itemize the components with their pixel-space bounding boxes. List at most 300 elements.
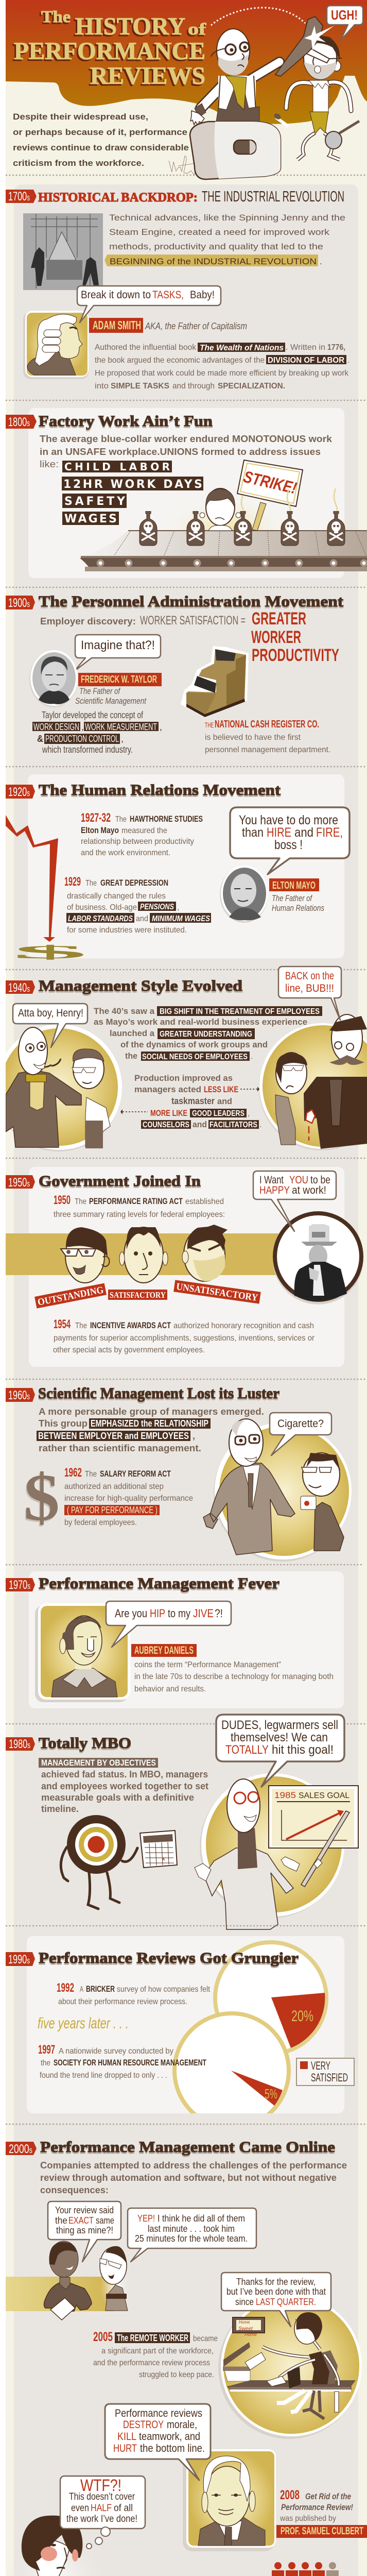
intro text: or perhaps because of it, performance: [13, 127, 187, 137]
paragraph: [40, 2160, 347, 2195]
speech bubble: exact same: thing as mine?!: [56, 2225, 113, 2235]
text: salary reform act: authorized an additional step: [64, 1482, 164, 1491]
text: 2008 Culbert book: was published by: [279, 2514, 336, 2523]
pie chart 1997: 5 percent: 5%: [265, 2086, 277, 2102]
speech bubble: hire and fire: You have to do more: [239, 813, 338, 827]
speech bubble: want you to be happy: I Want: [259, 1174, 284, 1186]
stencil list of union issues: [62, 461, 203, 526]
intro text: [13, 112, 189, 168]
paragraph: management by objectives: achieved fad status. In MBO, managers: [41, 1769, 208, 1780]
paragraph: [40, 434, 333, 469]
dotted swing arc: [211, 8, 305, 25]
speech bubble: last quarter: Thanks for the review,: [236, 2277, 316, 2287]
text: big shift: GREATER UNDERSTANDING: [160, 1030, 252, 1039]
title: PERFORMANCE: [14, 38, 205, 65]
header banner: [6, 0, 367, 179]
flattened dollar sign: $: [12, 942, 88, 962]
thought bubble: WTF: [60, 2476, 145, 2549]
speech bubble: destroy morale: the bottom line.: [140, 2443, 205, 2454]
Adam Smith biography: into: [95, 382, 109, 391]
speech bubble: last minute: [128, 2208, 256, 2262]
equation: worker satisfaction = greater worker productivity: Employer discovery:: [40, 616, 136, 626]
heading: HISTORICAL BACKDROP:: [38, 191, 198, 205]
speech bubble: destroy morale: DESTROY: [123, 2419, 164, 2431]
text: incentive awards act: 1954: [54, 1317, 71, 1331]
text: incentive awards act: INCENTIVE AWARDS ACT: [90, 1320, 171, 1330]
text: 1992 Bricker survey: A: [80, 1985, 83, 1994]
heading: The Personnel Administration Movement: [39, 593, 343, 610]
portrait: Aubrey Daniels: [35, 1603, 130, 1702]
Adam Smith biography: and through: [172, 382, 215, 391]
name tag: Elton Mayo: Human Relations: [272, 903, 324, 913]
speech bubble: want you to be happy: YOU: [289, 1174, 308, 1186]
intro paragraph: Steam Engine, created a need for improved work: [109, 227, 330, 237]
text: 1997 SHRM survey: SOCIETY FOR HUMAN RESOURCE MANAGEMENT: [54, 2058, 206, 2067]
character: coworker with review: [44, 2241, 92, 2320]
speech bubble: UGH: [327, 6, 363, 40]
speech bubble: last quarter: but I’ve been done with that: [226, 2286, 326, 2297]
poison bottles: [139, 511, 345, 546]
text: performance rating act: established: [185, 1197, 224, 1206]
paragraph: management by objectives: timeline.: [41, 1804, 79, 1814]
speech bubble: back on the line: BACK on the: [285, 970, 334, 982]
legend: very satisfied: SATISFIED: [311, 2071, 348, 2084]
text: salary reform act: 1962: [64, 1466, 82, 1480]
Great Depression text: 1929: [64, 875, 81, 889]
intro paragraph: BEGINNING of the INDUSTRIAL REVOLUTION: [110, 257, 317, 266]
right circle: taskmaster and injured worker: [259, 1014, 367, 1150]
Hawthorne studies text: [81, 811, 203, 857]
name tag: Taylor: FREDERICK W. TAYLOR: [81, 674, 157, 685]
paragraph: review through automation and software, but not without negative: [40, 2173, 337, 2183]
section: 1990s reviews got grungier: [6, 1936, 354, 2128]
text: incentive awards act: [53, 1317, 315, 1354]
text: salary reform act: increase for high-quality performance: [64, 1494, 193, 1503]
circle: manager offering cigarette: [203, 1419, 352, 1562]
name tag: Elton Mayo: ELTON MAYO: [272, 880, 316, 891]
Great Depression text: ,: [177, 903, 179, 912]
heading: Factory Work Ain’t Fun: [39, 413, 213, 430]
paragraph: in an UNSAFE workplace.UNIONS formed to address issues: [40, 447, 321, 457]
strike sign: STRIKE!: [242, 467, 299, 498]
text: 1992 Bricker survey: 1992: [57, 1981, 74, 1995]
intro text: criticism from the workforce.: [13, 158, 144, 168]
speech bubble: legwarmers: [216, 1715, 344, 1787]
face: unsatisfactory: [182, 1225, 228, 1281]
panel background: [29, 1167, 344, 1367]
Taylor description: ,: [121, 734, 124, 744]
Taylor description: ,: [81, 722, 84, 732]
speech bubble: last quarter: since: [235, 2297, 254, 2307]
text: big shift: as Mayo’s work and real-world business experience: [94, 1017, 307, 1027]
speech bubble: exact same: EXACT: [68, 2215, 94, 2226]
text: less like taskmaster, more like leaders: [134, 1073, 261, 1129]
text: 1997 SHRM survey: [38, 2043, 206, 2080]
National Cash Register caption: [205, 719, 330, 754]
speech bubble: hip to my jive: to my: [168, 1607, 190, 1620]
stencil list of union issues: WAGES: [64, 513, 117, 526]
section: 2000s came online: [5, 2139, 367, 2576]
section: 1980s totally MBO: [6, 1715, 358, 1929]
paragraph: personable managers: EMPHASIZED the RELATIONSHIP: [91, 1418, 208, 1429]
conveyor belt: [80, 531, 367, 571]
name tag: Adam Smith: ADAM SMITH: [93, 318, 141, 332]
equation: worker satisfaction = greater worker productivity: WORKER SATISFACTION =: [140, 614, 246, 628]
paragraph: management by objectives: [39, 1758, 208, 1814]
text: 2008 Culbert book: Get Rid of the: [305, 2492, 351, 2501]
text: salary reform act: ( PAY FOR PERFORMANCE ): [67, 1505, 158, 1515]
Great Depression text: LABOR STANDARDS: [68, 914, 133, 923]
heading: [38, 189, 344, 205]
Great Depression text: for some industries were instituted.: [67, 926, 187, 935]
speech bubble: want you to be happy: HAPPY: [259, 1184, 290, 1196]
Adam Smith biography: [95, 343, 349, 391]
year tag 2000s: 2000s: [9, 2142, 32, 2156]
speech bubble: last quarter: [221, 2273, 331, 2327]
equation: worker satisfaction = greater worker productivity: WORKER: [251, 628, 301, 647]
Great Depression text: of business. Old-age: [67, 903, 137, 912]
strike sign: [237, 460, 303, 531]
glow behind coworker: [100, 2264, 131, 2311]
speech bubble: hire and fire: HIRE: [267, 825, 291, 840]
text: big shift: BIG SHIFT IN THE TREATMENT OF EMPLOYEES: [160, 1007, 320, 1016]
speech bubble: last minute: I think he did all of them: [158, 2213, 245, 2224]
text: 1992 Bricker survey: [57, 1981, 210, 2006]
text: big shift: The 40’s saw a: [94, 1006, 155, 1016]
signature: [169, 156, 209, 175]
speech bubble: cigarette: Cigarette?: [277, 1418, 324, 1430]
portrait: Adam Smith: [23, 311, 89, 379]
heading: Performance Management Fever: [39, 1575, 279, 1592]
character: manager with club: [190, 29, 279, 126]
speech bubble: destroy morale: teamwork, and: [139, 2431, 200, 2443]
text: performance rating act: [54, 1193, 225, 1219]
text: less like taskmaster, more like leaders: ,: [248, 1109, 250, 1118]
paragraph: personable managers: This group: [39, 1418, 88, 1429]
text: incentive awards act: The: [75, 1321, 87, 1330]
Taylor description: ,: [160, 722, 162, 732]
Hawthorne studies text: The: [115, 815, 127, 824]
speech bubble: want you to be happy: at work!: [292, 1184, 326, 1196]
text: 2005 remote worker: 2005: [93, 2330, 113, 2344]
left circle: good manager and worker: [0, 1024, 122, 1151]
portrait: Samuel Culbert: [183, 2449, 276, 2551]
year tag 1920s: 1920s: [8, 785, 30, 799]
name tag: Elton Mayo: The Father of: [272, 893, 313, 903]
Taylor description: [32, 710, 162, 755]
Adam Smith biography: SIMPLE TASKS: [111, 382, 169, 391]
target character with calendar: x: [162, 1856, 165, 1862]
text: less like taskmaster, more like leaders: .: [259, 1121, 261, 1129]
paragraph: personable managers: A more personable group of managers emerged.: [39, 1406, 264, 1417]
speech bubble: legwarmers: TOTALLY: [225, 1743, 269, 1757]
header background shape: [6, 0, 367, 124]
speech bubble: atta boy: Atta boy, Henry!: [18, 1007, 83, 1019]
speech bubble: last minute: 25 minutes for the whole team.: [135, 2233, 248, 2244]
text: 2008 Culbert book: [276, 2488, 367, 2538]
name tag: Taylor: [75, 673, 162, 706]
Great Depression text: PENSIONS: [140, 903, 174, 911]
heading: Totally MBO: [39, 1735, 131, 1752]
Hawthorne studies text: measured the: [121, 826, 167, 835]
five years later: five years later . . .: [38, 2015, 129, 2032]
text: less like taskmaster, more like leaders: and: [217, 1096, 232, 1106]
paragraph: Companies attempted to address the challenges of the performance: [40, 2160, 347, 2171]
speech bubble: hire and fire: FIRE,: [316, 825, 343, 840]
gold band behind coworkers: [6, 2277, 113, 2311]
cash register: [181, 646, 249, 718]
Adam Smith biography: DIVISION OF LABOR: [268, 356, 344, 365]
steam wisps: [241, 488, 337, 519]
speech bubble: legwarmers: themselves! We can: [231, 1731, 328, 1744]
text: 2005 remote worker: a significant part of the workforce,: [101, 2347, 214, 2355]
speech bubble: hip to my jive: JIVE: [193, 1607, 214, 1620]
Adam Smith biography: .: [347, 356, 349, 365]
text: salary reform act: [64, 1466, 193, 1527]
speech bubble: last quarter: LAST QUARTER.: [256, 2297, 316, 2307]
speech bubble: break it down: Break it down to: [81, 289, 151, 301]
arrow left: to good leader: [120, 1109, 148, 1114]
speech bubble: imagine that: Imagine that?!: [81, 638, 155, 652]
Taylor description: WORK MEASUREMENT: [85, 722, 157, 732]
text: big shift: the: [125, 1051, 137, 1061]
speech bubble: destroy morale: Performance reviews: [115, 2408, 202, 2419]
speech bubble: last minute: last minute . . . took him: [148, 2224, 235, 2234]
glow behind worker: [160, 495, 293, 567]
text: 1997 SHRM survey: the: [41, 2059, 50, 2067]
paragraph: personable managers: BETWEEN EMPLOYER and EMPLOYEES: [38, 1431, 189, 1441]
National Cash Register caption: THE: [205, 721, 214, 729]
speech bubble: legwarmers: DUDES, legwarmers sell: [221, 1718, 338, 1732]
speech bubble: exact same: same: [96, 2215, 114, 2226]
Hawthorne studies text: and the work environment.: [81, 849, 170, 857]
thought bubble: WTF: WTF?!: [80, 2476, 121, 2495]
intro paragraph: [104, 213, 345, 266]
stone wheel: [190, 122, 281, 179]
year tag 1900s: 1900s: [8, 596, 30, 610]
target character with calendar: [61, 1815, 177, 1909]
speech bubble: destroy morale: HURT: [113, 2443, 137, 2454]
section: 1960s scientific management lost: [6, 1385, 352, 1562]
speech bubble: hip to my jive: [106, 1601, 231, 1647]
chart board: 1985 sales goal: [269, 1786, 358, 1848]
striking worker: [200, 488, 241, 531]
speech bubble: exact same: [48, 2201, 121, 2262]
year tag 1700s: 1700s: [8, 190, 30, 204]
heading: Performance Management Came Online: [40, 2139, 335, 2156]
Adam Smith biography: SPECIALIZATION.: [218, 382, 285, 391]
text: 1992 Bricker survey: survey of how companies felt: [117, 1985, 210, 1994]
Great Depression text: MINIMUM WAGES: [152, 914, 210, 923]
text: 2005 remote worker: and the performance review process: [93, 2359, 210, 2367]
text: salary reform act: by federal employees.: [64, 1518, 137, 1527]
name tag: Adam Smith: AKA, the Father of Capitalism: [145, 321, 247, 331]
text: less like taskmaster, more like leaders: LESS LIKE: [204, 1084, 238, 1094]
character: caveman: [273, 36, 359, 160]
panel background: [28, 408, 344, 578]
speech bubble: break it down: TASKS,: [152, 289, 184, 301]
paragraph: personable managers: [37, 1406, 264, 1453]
text: 2005 remote worker: became: [193, 2334, 218, 2343]
character: frustrated employee with annual review: [22, 2516, 131, 2576]
text: less like taskmaster, more like leaders: Production improved as: [134, 1073, 233, 1083]
name tag and caption: Aubrey Daniels: behavior and results.: [134, 1685, 206, 1693]
face: outstanding: [61, 1227, 110, 1283]
text: incentive awards act: authorized honorary recognition and cash: [173, 1321, 314, 1330]
speech bubble: break it down: [77, 286, 221, 323]
text: big shift: [94, 1006, 322, 1061]
text: 1992 Bricker survey: BRICKER: [86, 1984, 115, 1994]
thought bubble: WTF: This doesn’t cover: [69, 2492, 135, 2502]
text: big shift: launched a: [110, 1028, 155, 1038]
paragraph: The average blue-collar worker endured MONOTONOUS work: [40, 434, 333, 444]
text: less like taskmaster, more like leaders: MORE LIKE: [150, 1108, 187, 1118]
intro paragraph: Technical advances, like the Spinning Jenny and the: [109, 213, 345, 223]
name tag and caption: Aubrey Daniels: in the late 70s to describe a technology for managing both: [134, 1672, 334, 1681]
paragraph: management by objectives: and employees worked together to set: [41, 1781, 208, 1791]
speech bubble: want you to be happy: [253, 1171, 336, 1231]
pie chart 1992: 20 percent: 20%: [291, 2008, 313, 2025]
heading: The Human Relations Movement: [39, 782, 281, 799]
portrait: Elton Mayo: [220, 866, 268, 923]
speech bubble: hire and fire: and: [294, 825, 313, 840]
chart board: 1985 sales goal: 1985: [274, 1790, 296, 1800]
equation: worker satisfaction = greater worker productivity: GREATER: [252, 609, 306, 629]
Adam Smith biography: . Written in: [286, 343, 325, 352]
text: performance rating act: PERFORMANCE RATING ACT: [89, 1196, 183, 1206]
title: HISTORY: [75, 13, 185, 40]
text: less like taskmaster, more like leaders: FACILITATORS: [209, 1121, 257, 1129]
panel background: [28, 774, 344, 958]
chart board: 1985 sales goal: SALES GOAL: [299, 1791, 349, 1800]
paragraph: personable managers: rather than scientific management.: [39, 1443, 201, 1453]
year tag 1960s: 1960s: [8, 1388, 30, 1402]
title: REVIEWS: [90, 62, 205, 90]
Great Depression text: drastically changed the rules: [67, 892, 166, 901]
thought bubble: WTF: of all: [114, 2503, 133, 2514]
name tag and caption: Aubrey Daniels: AUBREY DANIELS: [134, 1645, 194, 1656]
Great Depression text: and: [136, 914, 148, 923]
panel background: [27, 1936, 344, 2113]
speech bubble: destroy morale: morale,: [167, 2419, 197, 2431]
pie chart 1997: 5 percent: [174, 2013, 289, 2128]
speech bubble: hire and fire: boss !: [274, 838, 303, 852]
year tag 1980s: 1980s: [9, 1737, 30, 1751]
paragraph: personable managers: ,: [193, 1431, 195, 1441]
icon: dollar sign: $: [24, 1461, 60, 1535]
year tag 1940s: 1940s: [8, 981, 30, 995]
text: 1997 SHRM survey: found the trend line dropped to only . . .: [40, 2071, 167, 2080]
speech bubble: cigarette: [270, 1413, 331, 1455]
speech bubble: exact same: the: [55, 2215, 67, 2226]
Adam Smith biography: 1776,: [327, 343, 345, 352]
speech bubble: back on the line: [278, 967, 341, 1020]
speech bubble: UGH: UGH!: [331, 7, 358, 23]
arrow right: to taskmaster: [240, 1087, 259, 1092]
section: 1700s historical backdrop: [6, 189, 349, 391]
National Cash Register caption: personnel management department.: [205, 745, 330, 754]
heading: Scientific Management Lost its Luster: [38, 1385, 279, 1402]
speech bubble: hip to my jive: Are you: [115, 1607, 147, 1620]
year tag 1800s: 1800s: [8, 415, 30, 429]
Uncle Sam circle: [273, 1211, 363, 1304]
name tag and caption: Aubrey Daniels: coins the term “Performance Management”: [134, 1660, 281, 1669]
speech bubble: destroy morale: KILL: [117, 2431, 136, 2443]
year tag 1990s: 1990s: [8, 1953, 30, 1967]
stamp: outstanding: OUTSTANDING: [37, 1284, 104, 1308]
year tag 1970s: 1970s: [9, 1578, 30, 1592]
text: performance rating act: 1950: [54, 1193, 71, 1207]
text: less like taskmaster, more like leaders: COUNSELORS: [143, 1121, 189, 1129]
stencil list of union issues: CHILD LABOR: [64, 461, 170, 473]
legend: very satisfied: [296, 2058, 354, 2086]
text: 1992 Bricker survey: about their performance review process.: [58, 1997, 187, 2006]
intro text: Despite their widespread use,: [13, 112, 148, 122]
circle: overwhelmed remote worker: Home: [244, 2332, 257, 2337]
section: 1800s factory work: [6, 408, 367, 578]
section: 1970s performance management fever: [6, 1571, 344, 1708]
text: big shift: .: [251, 1052, 253, 1061]
text: 2005 remote worker: [93, 2330, 218, 2379]
name tag: Taylor: The Father of: [79, 686, 121, 696]
title: of: [188, 20, 206, 38]
club: [275, 16, 323, 76]
text: big shift: SOCIAL NEEDS OF EMPLOYEES: [142, 1053, 248, 1061]
Adam Smith biography: the book argued the economic advantages of the: [95, 356, 265, 365]
Taylor description: PRODUCTION CONTROL: [45, 734, 119, 744]
impact star: [304, 26, 334, 50]
paragraph: like:: [40, 459, 59, 469]
thought bubble: WTF: the work I’ve done!: [66, 2514, 137, 2524]
speech bubble: destroy morale: [105, 2404, 211, 2480]
paragraph: consequences:: [40, 2185, 109, 2195]
title: The: [41, 7, 71, 26]
speech bubble: break it down: Baby!: [190, 289, 215, 301]
speech bubble: back on the line: line, BUB!!!: [285, 982, 334, 994]
Adam Smith biography: Authored the influential book: [95, 343, 197, 352]
text: less like taskmaster, more like leaders: managers acted: [134, 1084, 201, 1094]
thought bubble: WTF: HALF: [91, 2503, 112, 2514]
section: 1920s human relations: [6, 774, 349, 962]
equation: worker satisfaction = greater worker productivity: [40, 609, 339, 665]
stencil list of union issues: SAFETY: [64, 495, 126, 508]
text: performance rating act: three summary rating levels for federal employees:: [54, 1210, 225, 1219]
portrait: Frederick W. Taylor: [29, 650, 78, 707]
stamp: satisfactory: SATISFACTORY: [110, 1290, 166, 1300]
name tag: Taylor: Scientific Management: [75, 696, 147, 706]
speech bubble: want you to be happy: to be: [310, 1174, 330, 1186]
speech bubble: hip to my jive: ?!: [215, 1607, 223, 1620]
heading: Government Joined In: [39, 1173, 201, 1190]
circle: overwhelmed remote worker: [218, 2295, 362, 2439]
text: less like taskmaster, more like leaders: taskmaster: [171, 1096, 215, 1106]
paragraph: management by objectives: measurable goals with a definitive: [41, 1792, 194, 1803]
speech bubble: hip to my jive: HIP: [150, 1607, 165, 1620]
section: 1950s government: [6, 1167, 363, 1367]
text: incentive awards act: other special acts by government employees.: [53, 1346, 205, 1354]
pie chart 1992: 20 percent: [215, 1942, 326, 2054]
intro paragraph: .: [320, 257, 322, 266]
intro text: reviews continue to draw considerable: [13, 143, 189, 152]
glow behind woman: [5, 2530, 108, 2576]
text: big shift: of the dynamics of work groups and: [120, 1040, 268, 1049]
Hawthorne studies text: 1927-32: [81, 811, 111, 825]
engraving: spinning jenny: [23, 213, 103, 290]
text: less like taskmaster, more like leaders: GOOD LEADERS: [192, 1109, 244, 1118]
stencil list of union issues: 12HR WORK DAYS: [63, 478, 202, 491]
speech bubble: legwarmers: hit this goal!: [272, 1743, 334, 1757]
Hawthorne studies text: HAWTHORNE STUDIES: [130, 814, 203, 824]
